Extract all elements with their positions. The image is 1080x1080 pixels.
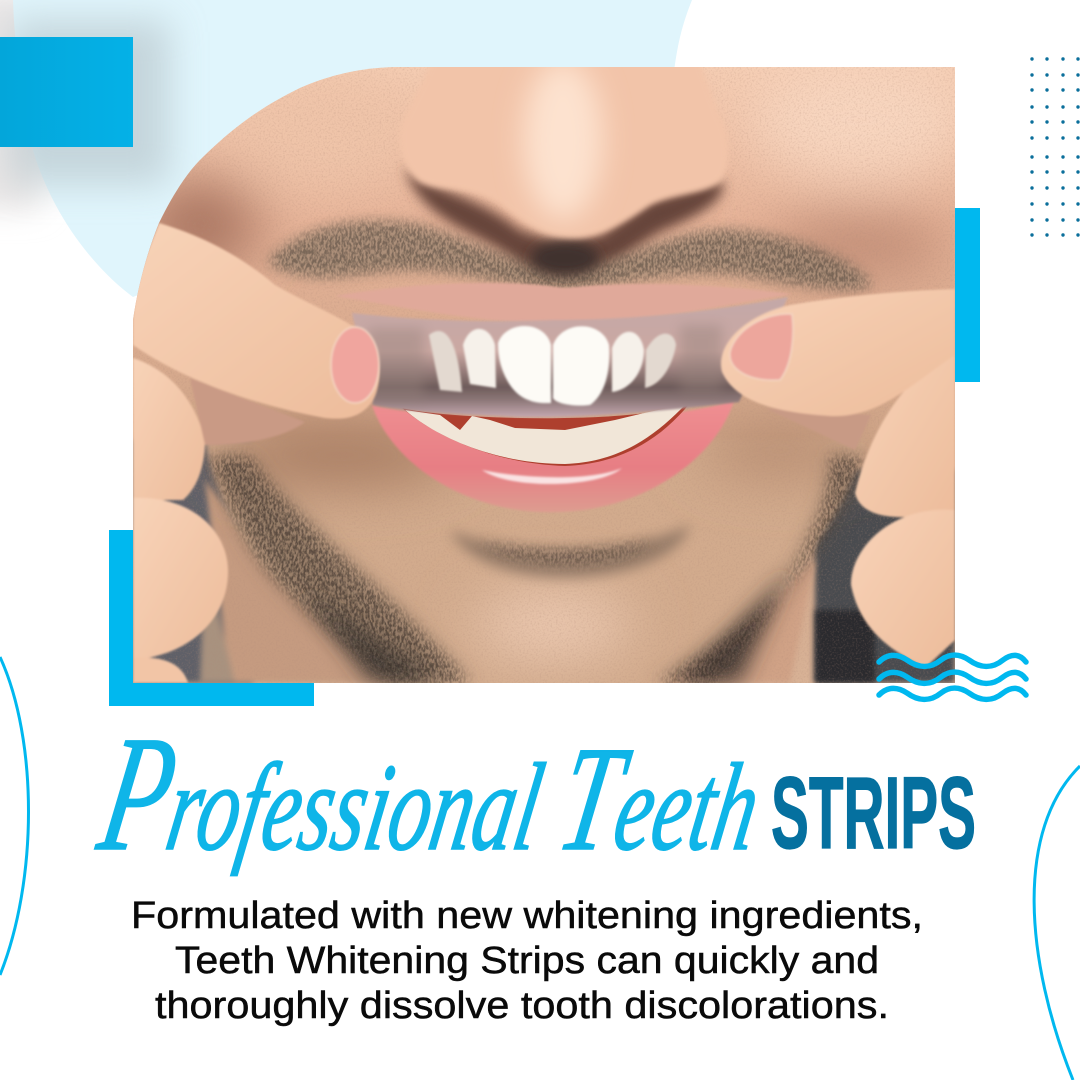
cheek tones [140,60,970,660]
lip highlight [482,468,622,484]
upper lip [335,283,792,324]
description text: Formulated with new whitening ingredients, [131,895,923,937]
left hand fingers [133,223,379,683]
right curved line [1034,766,1080,1080]
blue square top left [0,37,133,147]
left thumb nail [331,327,379,403]
nose [400,67,728,243]
whitening strip [352,297,788,417]
soft shadow behind blue square [10,20,170,185]
neck [200,480,815,683]
right blue bar [955,208,980,382]
backdrop beside jaw [133,440,955,683]
wave decoration [879,655,1026,699]
lower lip [372,400,734,512]
chin stubble patch [450,525,690,578]
centre shadow under nose [531,241,599,275]
dot grid [1030,57,1080,237]
nostril shadow [404,165,723,279]
right thumb nail [730,314,793,380]
skin pore texture [133,67,955,683]
moustache stubble [268,221,872,290]
upper teeth [429,326,676,406]
background light blue shape [13,0,692,297]
description text: Teeth Whitening Strips can quickly and [175,940,879,982]
title script: Professional Teeth [88,702,776,885]
left curved line [0,657,28,975]
face skin base [133,67,955,683]
right hand fingers [721,289,955,668]
beard dark lower parts [300,570,790,683]
description text: thoroughly dissolve tooth discolorations. [155,985,889,1027]
left corner bracket [109,530,314,706]
strip side shading [368,325,722,400]
jaw and chin skin [205,440,865,690]
photo: smiling man holding whitening strip [133,40,970,690]
moustache base shading [268,221,872,290]
beard hair texture [209,457,862,683]
beard base shading [209,457,862,683]
description text [131,895,923,1027]
mouth interior with lower teeth [402,403,690,466]
soft grey glow at left edge [0,0,40,210]
